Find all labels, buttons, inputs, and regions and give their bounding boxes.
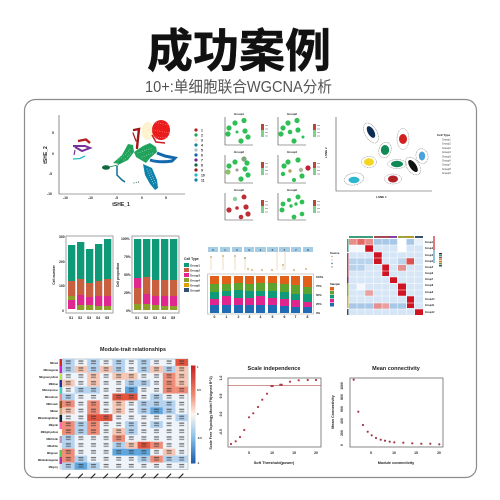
facet header labels: 4: [260, 248, 262, 252]
facet header labels: 5: [272, 248, 274, 252]
cluster: left group: [73, 140, 90, 159]
chart: cell number stacked bars: S3: [87, 316, 91, 320]
chart: scale independence: 1.0: [219, 376, 223, 380]
chart: tSNE clusters: [43, 115, 185, 208]
chart: cell number stacked bars: 300: [59, 235, 65, 239]
x labels: 8: [307, 315, 309, 319]
module labels: MElightyellow: [41, 430, 59, 434]
cluster: green right: [134, 143, 157, 163]
chart: tSNE clusters: -10: [88, 196, 93, 200]
legend: cell type: Group9: [442, 171, 451, 175]
chart: mean connectivity: Module connectivity: [378, 461, 415, 465]
facet header strip: [208, 247, 313, 252]
x labels: 7: [295, 315, 297, 319]
chart: mean connectivity: 1000: [340, 382, 344, 390]
legend: cluster numbers: 9: [201, 168, 203, 172]
facet header labels: 2: [236, 248, 238, 252]
chart: tSNE clusters: 0: [52, 152, 54, 156]
legend: cell type: Group8: [442, 167, 451, 171]
module labels: MEtan: [50, 409, 58, 413]
legend: cell type: Group1: [442, 138, 451, 142]
module labels: MEbrown: [46, 402, 58, 406]
data points: [230, 379, 317, 445]
legend: cluster numbers: 7: [201, 158, 203, 162]
threshold line: [228, 385, 321, 387]
chart: cell proportion stacked bars: 100%: [121, 237, 130, 241]
chart: tSNE clusters: 0: [141, 196, 143, 200]
chart: cell proportion stacked bars: 75%: [124, 255, 131, 259]
annotation legend: [439, 253, 442, 266]
chart: cell number stacked bars: 200: [59, 260, 65, 264]
legend: correlation colour scale: Scale Free Topology Model Fit(signed R^2): [209, 376, 213, 450]
small map 5: Group5: [234, 188, 244, 192]
row labels: Group11: [425, 305, 435, 307]
legend: correlation colour scale: 0.5: [197, 388, 201, 392]
chart: cell proportion stacked bars: [116, 236, 179, 320]
chart: cell proportion stacked bars: S2: [144, 316, 148, 320]
x labels: [214, 315, 309, 319]
chart: faceted proportion bars: 50%: [316, 293, 322, 297]
row annotation bar: [347, 239, 348, 315]
legend: cell type: Group7: [442, 163, 451, 167]
row labels: Group9: [425, 292, 434, 294]
legend: cluster numbers: 3: [201, 138, 203, 142]
chart: scale independence: -0.5: [219, 429, 223, 435]
row labels: Group5: [425, 267, 434, 269]
legend: cluster numbers: 4: [201, 144, 203, 148]
legend: cluster numbers: 5: [201, 148, 203, 152]
chart: mean connectivity: 20: [437, 451, 441, 455]
facet header labels: 6: [284, 248, 286, 252]
x labels: 2: [238, 315, 240, 319]
legend: correlation colour scale: 1: [197, 365, 199, 369]
cluster: dark teal: [117, 166, 125, 182]
panel: case card: [24, 100, 476, 478]
chart: tSNE with ellipses: t-SNE 2: [324, 147, 328, 158]
chart title: Scale independence: [248, 366, 300, 372]
x labels: 4: [260, 315, 262, 319]
chart: scale independence: Soft Threshold(power): [254, 461, 295, 465]
x labels: 5: [272, 315, 274, 319]
row labels: Group8: [425, 285, 434, 287]
cluster: red: [152, 120, 170, 143]
legend: cluster numbers: 2: [201, 134, 203, 138]
row labels: Group7: [425, 279, 434, 281]
module labels: MEpink: [49, 423, 59, 427]
chart: mean connectivity: 5: [370, 451, 372, 455]
column annotation bar: [349, 236, 423, 238]
small map 4: Group4: [287, 150, 297, 154]
chart: faceted proportion bars: [208, 247, 340, 319]
small map 1: Group1: [234, 112, 244, 116]
module labels: MEblue: [49, 382, 59, 386]
legend: Sample: [330, 282, 340, 286]
data points: [353, 379, 440, 445]
chart: tSNE with ellipses: [324, 117, 451, 199]
x labels: 1: [226, 315, 228, 319]
module labels: MEred: [50, 361, 58, 365]
row labels: Group6: [425, 273, 434, 275]
chart: tSNE clusters: -10: [47, 192, 52, 196]
chart: mean connectivity: [331, 366, 443, 465]
chart: mean connectivity: 400: [340, 418, 344, 424]
legend: cell type swatches: [184, 257, 200, 292]
chart: small multiples feature maps: [225, 112, 320, 220]
module labels: MEdarkmagenta: [38, 458, 59, 462]
module labels: [38, 361, 59, 469]
chart title: Mean connectivity: [372, 366, 421, 372]
chart: mean connectivity: 0: [340, 444, 344, 446]
chart: cell proportion stacked bars: 0%: [126, 309, 131, 313]
chart: tSNE clusters: tSHE_2: [43, 146, 49, 164]
cluster: dark red: [133, 129, 139, 148]
legend: cluster numbers: 8: [201, 164, 203, 168]
cluster: light yellow: [142, 122, 154, 140]
chart: mean connectivity: 600: [340, 406, 344, 412]
cell values: [62, 359, 188, 470]
chart: cell number stacked bars: S5: [105, 316, 109, 320]
legend: [330, 251, 340, 306]
module labels: MEgreenyellow: [39, 375, 59, 379]
facet header labels: 1: [224, 248, 226, 252]
legend: cell type: Group2: [442, 142, 451, 146]
row labels: Group3: [425, 255, 434, 257]
facet header labels: 3: [248, 248, 250, 252]
chart: mean connectivity: Mean Connectivity: [331, 394, 335, 429]
small map 2: Group2: [287, 112, 297, 116]
module labels: MEsalmon: [45, 395, 58, 399]
chart: cell proportion stacked bars: S3: [153, 316, 157, 320]
chart: faceted proportion bars: 25%: [316, 302, 322, 306]
legend: cluster numbers: 10: [201, 174, 205, 178]
chart: scale independence: 0.0: [219, 412, 223, 416]
legend: correlation colour scale: -1: [197, 461, 200, 465]
chart: cell proportion stacked bars: S4: [162, 316, 166, 320]
subtitle: 10+:单细胞联合WGCNA分析: [145, 78, 332, 96]
chart: cell proportion stacked bars: Cell proportion: [116, 263, 120, 287]
facet header labels: 0: [212, 248, 214, 252]
module labels: MEgreen: [47, 451, 58, 455]
chart: faceted proportion bars: 75%: [316, 284, 322, 288]
x labels: 6: [284, 315, 286, 319]
legend: cell type swatches: Cell Type: [184, 257, 199, 261]
colour bar tick marks: [265, 126, 320, 212]
colour bars: [261, 124, 316, 213]
coloured cells: [62, 359, 188, 470]
facet header labels: 8: [307, 248, 309, 252]
stacked columns: [210, 305, 312, 313]
legend: cluster numbers: 6: [201, 154, 203, 158]
row labels: Group1: [425, 242, 434, 244]
cluster: green left: [113, 144, 134, 164]
chart: cell proportion stacked bars: S1: [135, 316, 139, 320]
cluster: blue: [150, 153, 175, 162]
legend: cell type swatches: Group6: [190, 288, 200, 292]
legend: cluster numbers: 11: [201, 178, 205, 182]
facet header labels: [212, 248, 309, 252]
legend: cell type swatches: Group5: [190, 284, 200, 288]
x labels: 0: [214, 315, 216, 319]
chart: module-trait heatmap: [38, 347, 188, 478]
legend: cluster numbers: 1: [201, 128, 203, 132]
legend: cell type: Cell Type: [437, 133, 450, 137]
chart: scale independence: 5: [248, 451, 250, 455]
module labels: MEgrey: [49, 465, 59, 469]
chart: tSNE clusters: -5: [115, 196, 118, 200]
legend: cell type: Group6: [442, 158, 451, 162]
legend: cell type: [437, 133, 451, 175]
legend: correlation colour scale: [191, 365, 213, 465]
x labels: 3: [249, 315, 251, 319]
legend: cell type: Group4: [442, 150, 451, 154]
small map 3: Group3: [234, 150, 244, 154]
chart: clustered correlation heatmap: [347, 236, 442, 315]
chart: cell number stacked bars: [52, 235, 113, 320]
chart: scale independence: 0.5: [219, 394, 223, 398]
module labels: MEmagenta: [43, 368, 59, 372]
module labels: MEwhite: [47, 444, 59, 448]
legend: cluster numbers: [194, 128, 205, 182]
chart: mean connectivity: 200: [340, 430, 344, 436]
row labels: Group4: [425, 260, 434, 263]
cluster: teal-blue lower: [143, 164, 158, 190]
module colour strip: [60, 359, 62, 470]
chart: cell number stacked bars: 0: [62, 309, 64, 313]
chart: cell number stacked bars: Cell number: [52, 265, 56, 285]
group point clouds: [348, 125, 425, 183]
group ellipses: [343, 120, 430, 187]
lollipop strip: [210, 250, 307, 271]
row labels: Group12: [425, 312, 435, 314]
legend: correlation colour scale: -0.5: [197, 436, 202, 440]
chart: cell proportion stacked bars: 25%: [124, 291, 131, 295]
cluster: dark sparse: [134, 182, 139, 186]
legend: Source: [330, 251, 340, 255]
legend: cell type: Group3: [442, 146, 451, 150]
chart: cell number stacked bars: S4: [96, 316, 100, 320]
title: 成功案例: [147, 15, 331, 81]
legend: cell type swatches: Group4: [190, 278, 200, 282]
legend: cell type swatches: Group3: [190, 274, 200, 278]
colour scale: [433, 236, 435, 263]
legend: correlation colour scale: 0: [197, 412, 199, 416]
chart: tSNE clusters: 5: [165, 196, 167, 200]
legend: cell type: Group5: [442, 154, 451, 158]
small map 6: Group6: [287, 188, 297, 192]
heading: Module-trait relationships: [100, 347, 166, 353]
heatmap cells: [349, 239, 423, 315]
chart: mean connectivity: 15: [414, 451, 418, 455]
module labels: MEturquoise: [42, 388, 59, 392]
legend: cell type swatches: Group2: [190, 268, 200, 272]
row labels: Group2: [425, 248, 434, 250]
chart: mean connectivity: 10: [392, 451, 396, 455]
chart: faceted proportion bars: 0%: [316, 311, 321, 315]
module labels: MEmidnightblue: [38, 416, 59, 420]
chart: tSNE clusters: -10: [63, 196, 68, 200]
chart: scale independence: 10: [270, 451, 274, 455]
chart: mean connectivity: 800: [340, 394, 344, 400]
chart: tSNE clusters: -5: [49, 172, 52, 176]
chart: scale independence: [219, 366, 321, 465]
row labels: [425, 242, 435, 314]
row labels: Group10: [425, 299, 435, 301]
chart: scale independence: 15: [292, 451, 296, 455]
chart: cell number stacked bars: S2: [78, 316, 82, 320]
chart: tSNE clusters: 5: [52, 131, 54, 135]
chart: scale independence: 20: [314, 451, 318, 455]
chart: cell number stacked bars: 100: [59, 284, 65, 288]
chart: tSNE with ellipses: t-SNE 1: [376, 195, 387, 199]
trait tick marks: [66, 474, 183, 478]
module labels: MEthistle: [46, 437, 59, 441]
cluster: dark green: [102, 160, 122, 170]
chart: cell proportion stacked bars: S5: [171, 316, 175, 320]
chart: faceted proportion bars: 100%: [316, 275, 324, 279]
chart: cell proportion stacked bars: 50%: [124, 273, 131, 277]
facet header labels: 7: [295, 248, 297, 252]
legend: cell type swatches: Group1: [190, 264, 200, 268]
chart: cell number stacked bars: S1: [69, 316, 73, 320]
chart: tSNE clusters: tSHE_1: [112, 202, 130, 208]
